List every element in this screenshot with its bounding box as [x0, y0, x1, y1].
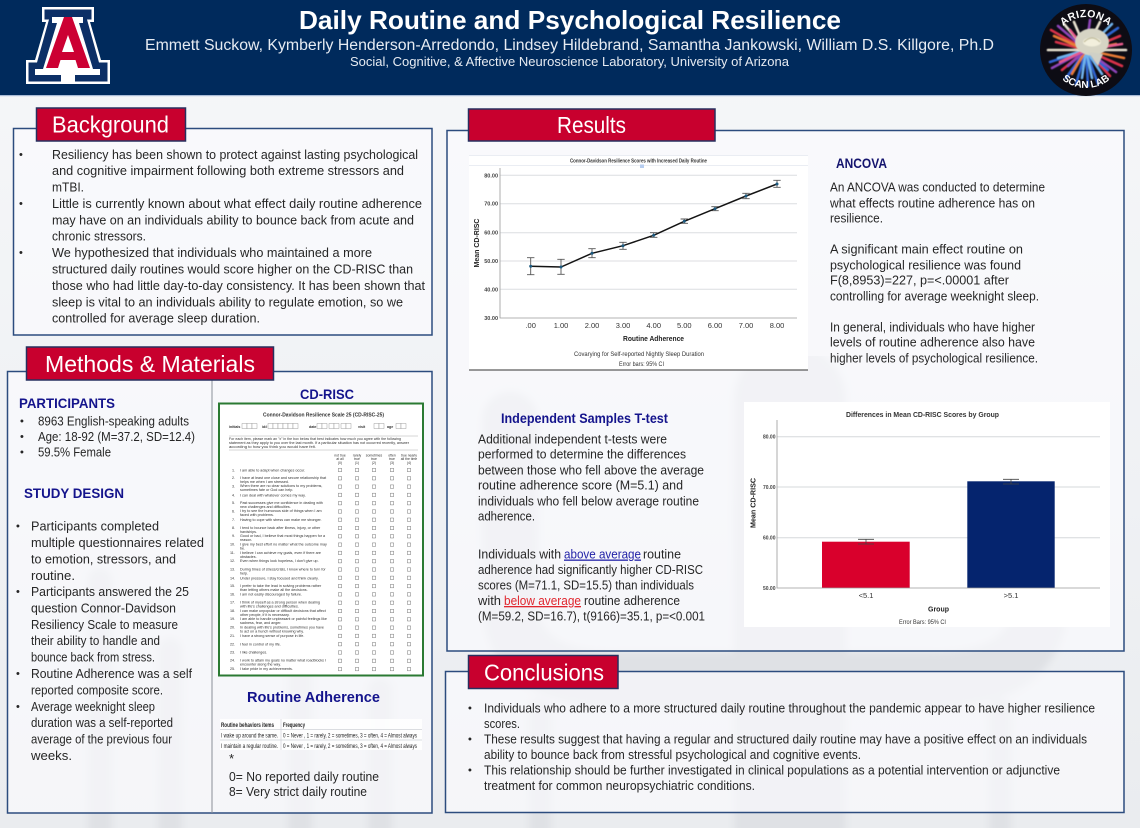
CD-RISC questionnaire form: rarely [353, 454, 362, 458]
CD-RISC questionnaire form: I have a strong sense of purpose in life. [240, 634, 304, 638]
text block: ANCOVA: higher levels of psychological resilience. [830, 350, 1038, 366]
text block: ANCOVA: A significant main effect routine on [830, 242, 1023, 256]
heading: results [468, 109, 715, 141]
CD-RISC questionnaire form: I prefer to take the lead in solving problems rather [240, 584, 322, 588]
text block: conclusions bullets: • [468, 764, 472, 776]
bar chart: CD-RISC by group: Group [928, 604, 949, 614]
text block: study design: bounce back from stress. [31, 650, 155, 664]
bar chart: CD-RISC by group: <5.1 [859, 591, 873, 600]
heading: methods and materials [26, 347, 274, 380]
CD-RISC questionnaire form [219, 404, 423, 676]
heading: conclusions: Conclusions [484, 660, 604, 686]
routine behaviours table: I maintain a regular routine. [221, 743, 278, 750]
CD-RISC questionnaire form: Even when things look hopeless, I don't give up. [240, 559, 319, 563]
CD-RISC questionnaire form: helps me when I am stressed. [240, 480, 289, 484]
panel: methods and materials [8, 347, 432, 813]
text block: study design: to emotion, stressors, and [31, 552, 176, 566]
CD-RISC questionnaire form: 3. [232, 484, 235, 488]
text block: t-test description: performed to determine the differences [478, 446, 686, 462]
line chart: CD-RISC by routine adherence: 6.00 [708, 321, 722, 330]
CD-RISC questionnaire form: When there are no clear solutions to my problems, [240, 484, 322, 488]
text block: t-test results: routine adherence [584, 593, 680, 608]
CD-RISC questionnaire form: I believe I can achieve my goals, even if there are [240, 551, 321, 555]
CD-RISC questionnaire form: I think of myself as a strong person when dealing [240, 600, 320, 604]
text block: background bullets: Resiliency has been shown to protect against lasting psychological [52, 147, 418, 162]
text block: conclusions bullets: treatment for common neuropsychiatric conditions. [484, 778, 755, 793]
CD-RISC questionnaire form: 19. [230, 617, 235, 621]
heading: background [36, 108, 186, 141]
text block: t-test description: individuals who fell below average routine [478, 494, 699, 508]
text block: study design: weeks. [30, 748, 72, 763]
CD-RISC questionnaire form: 18. [230, 609, 235, 613]
CD-RISC questionnaire form: true [371, 457, 377, 461]
text block: ANCOVA: In general, individuals who have higher [830, 320, 1036, 334]
CD-RISC questionnaire form: 20. [230, 626, 235, 630]
line chart: CD-RISC by routine adherence [469, 155, 808, 370]
heading: independent samples t-test: Independent Samples T-test [501, 411, 668, 426]
CD-RISC questionnaire form: 22. [230, 642, 235, 646]
text block: background bullets: controlled for average sleep duration. [52, 310, 260, 326]
CD-RISC questionnaire form: with life's challenges and difficulties. [240, 604, 299, 608]
CD-RISC questionnaire form: 14. [230, 576, 235, 580]
text block: t-test results: scores (M=71.1, SD=15.5) than individuals [478, 578, 694, 592]
CD-RISC questionnaire form: Past successes give me confidence in dealing with [240, 501, 323, 505]
CD-RISC questionnaire form: sadness, fear, and anger. [240, 621, 281, 625]
routine behaviours table [220, 719, 422, 750]
text block: study design: Resiliency Scale to measure [31, 617, 178, 632]
CD-RISC questionnaire form: 23. [230, 650, 235, 654]
text block: t-test results: below average [504, 593, 581, 608]
heading: routine adherence: Routine Adherence [247, 689, 380, 706]
CD-RISC questionnaire form: to act on a hunch without knowing why. [240, 630, 304, 634]
heading: study design: STUDY DESIGN [24, 485, 124, 501]
authors: Emmett Suckow, Kymberly Henderson-Arredondo, Lindsey Hildebrand, Samantha Jankowski, William D.S. Killgore, Ph.D [145, 37, 994, 54]
line chart: CD-RISC by routine adherence: Error bars: 95% CI [619, 361, 664, 368]
text block: t-test results: with [477, 593, 501, 608]
bar chart: CD-RISC by group: Differences in Mean CD-RISC Scores by Group [846, 412, 999, 419]
heading: results: Results [557, 112, 626, 138]
CD-RISC questionnaire form: (0) [338, 461, 342, 465]
CD-RISC questionnaire form: encounter along the way. [240, 662, 281, 666]
text block: conclusions bullets: • [468, 734, 472, 746]
text block: conclusions bullets: Individuals who adhere to a more structured daily routine throughout the pandemic appear to have higher resilience [484, 700, 1095, 716]
CD-RISC questionnaire form: 8. [232, 526, 235, 530]
line chart: CD-RISC by routine adherence: 50.00 [484, 259, 498, 265]
routine scale key [229, 751, 379, 799]
CD-RISC questionnaire form: I am not easily discouraged by failure. [240, 592, 302, 596]
CD-RISC questionnaire form: sometimes fate or God can help. [240, 488, 293, 492]
CD-RISC questionnaire form: 6. [232, 510, 235, 514]
text block: background bullets [19, 147, 425, 326]
line chart: CD-RISC by routine adherence: 5.00 [677, 321, 692, 330]
CD-RISC questionnaire form: Having to cope with stress can make me stronger. [240, 518, 322, 522]
CD-RISC questionnaire form: I tend to bounce back after illness, injury, or other [240, 526, 321, 530]
bar: above average [967, 481, 1055, 588]
text block: conclusions bullets [468, 700, 1095, 793]
panel: background [14, 108, 432, 335]
line chart: CD-RISC by routine adherence: Connor-Davidson Resilience Scores with Increased Daily Routine [570, 159, 707, 165]
CD-RISC questionnaire form: at all [336, 457, 344, 461]
text block: t-test description: adherence. [478, 508, 535, 524]
bar: below average [822, 542, 910, 588]
CD-RISC questionnaire form: I am able to handle unpleasant or painful feelings like [240, 617, 327, 621]
line chart: CD-RISC by routine adherence: 8.00 [770, 321, 784, 330]
routine scale key: * [229, 751, 234, 766]
CD-RISC questionnaire form: (1) [355, 461, 359, 465]
text block: t-test results [477, 546, 705, 624]
text block: background bullets: • [19, 149, 23, 161]
text block: study design: duration was a self-reported [31, 715, 173, 730]
text block: participants: 8963 English-speaking adults [38, 414, 189, 428]
routine behaviours table: Routine behaviors items [221, 722, 274, 729]
text block: background bullets: may have on an individuals ability to bounce back from acute and [52, 212, 414, 228]
CD-RISC questionnaire form: 10. [230, 542, 235, 546]
CD-RISC questionnaire form: (3) [390, 461, 394, 465]
header banner [0, 0, 1140, 96]
line chart: CD-RISC by routine adherence: 7.00 [739, 321, 753, 330]
text block: study design: their ability to handle and [31, 633, 160, 648]
CD-RISC questionnaire form: I work to attain my goals no matter what roadblocks I [240, 658, 326, 662]
text block: conclusions bullets: • [468, 702, 472, 714]
text block: background bullets: Little is currently known about what effect daily routine adherence [52, 196, 422, 211]
text block: background bullets: structured daily routines would score higher on the CD-RISC than [52, 262, 413, 276]
line chart: CD-RISC by routine adherence: Routine Adherence [623, 334, 684, 343]
CD-RISC questionnaire form: other people, if it is necessary. [240, 613, 290, 617]
line chart: CD-RISC by routine adherence: 80.00 [484, 173, 498, 179]
CD-RISC questionnaire form: 5. [232, 501, 235, 505]
text block: t-test results: (M=59.2, SD=16.7), t(9166)=35.1, p=<0.001 [478, 608, 705, 624]
CD-RISC questionnaire form: faced with problems. [240, 513, 274, 517]
CD-RISC questionnaire form: I have at least one close and secure relationship that [240, 476, 326, 480]
heading: methods and materials: Methods & Materials [45, 351, 255, 377]
CD-RISC questionnaire form: In dealing with life's problems, sometimes you have [240, 626, 324, 630]
text block: t-test results: routine [643, 546, 681, 562]
heading: CD-RISC: CD-RISC [300, 386, 354, 402]
text block: study design: question Connor-Davidson [31, 600, 176, 616]
CD-RISC questionnaire form: id# [262, 425, 267, 429]
text block: study design: routine. [31, 568, 75, 583]
CD-RISC questionnaire form: true [354, 457, 360, 461]
CD-RISC questionnaire form: 7. [232, 518, 235, 522]
text block: background bullets: • [19, 198, 23, 210]
bar chart: CD-RISC by group: 60.00 [763, 536, 776, 542]
CD-RISC questionnaire form: I give my best effort no matter what the outcome may [240, 542, 327, 546]
CD-RISC questionnaire form: I try to see the humorous side of things when I am [240, 509, 322, 513]
CD-RISC questionnaire form: 9. [232, 534, 235, 538]
text block: participants: Age: 18-92 (M=37.2, SD=12.4) [38, 429, 195, 444]
text block: study design: reported composite score. [31, 682, 163, 698]
text block: ANCOVA: levels of routine adherence also have [830, 334, 1035, 350]
CD-RISC questionnaire form: 11. [230, 551, 235, 555]
CD-RISC questionnaire form: (2) [372, 461, 376, 465]
CD-RISC questionnaire form: I feel in control of my life. [240, 642, 281, 646]
line chart: CD-RISC by routine adherence: 30.00 [484, 316, 498, 322]
text block: background bullets: sleep is vital to an individuals ability to regulate emotion, so we [52, 294, 403, 310]
CD-RISC questionnaire form: true nearly [401, 454, 417, 458]
text block: study design: Participants completed [31, 518, 159, 534]
text block: participants: 59.5% Female [38, 444, 111, 460]
line chart: CD-RISC by routine adherence: 3.00 [616, 321, 630, 330]
CD-RISC questionnaire form: help. [240, 572, 248, 576]
CD-RISC questionnaire form: true [389, 457, 395, 461]
routine behaviours table: Frequency [283, 722, 305, 729]
CD-RISC questionnaire form: sometimes [366, 454, 382, 458]
icon: Arizona SCAN Lab circular logo [1040, 4, 1132, 96]
title: Daily Routine and Psychological Resilience [299, 5, 841, 35]
text block: study design: average of the previous four [31, 732, 173, 746]
CD-RISC questionnaire form: 21. [230, 634, 235, 638]
heading: ANCOVA: ANCOVA [836, 156, 887, 171]
text block: study design: Participants answered the 25 [31, 584, 189, 599]
panel: conclusions [446, 656, 1124, 812]
line chart: CD-RISC by routine adherence: 1.00 [554, 321, 568, 330]
line chart: CD-RISC by routine adherence: .00 [525, 321, 536, 330]
text block: background bullets: We hypothesized that individuals who maintained a more [52, 245, 372, 260]
text block: background bullets: • [19, 247, 23, 259]
text block: ANCOVA: controlling for average weeknight sleep. [830, 288, 1039, 304]
brain [1075, 28, 1109, 66]
CD-RISC questionnaire form: 24. [230, 658, 235, 662]
text block: participants: • [20, 416, 24, 428]
text block: study design: Routine Adherence was a self [31, 666, 192, 681]
CD-RISC questionnaire form: reason. [240, 538, 252, 542]
text block: study design: multiple questionnaires related [31, 535, 204, 550]
CD-RISC questionnaire form: For each item, please mark an "x" in the box below that best indicates how much you agree with the following [229, 437, 401, 441]
bar chart: CD-RISC by group: Error Bars: 95% CI [899, 620, 946, 626]
heading: participants: PARTICIPANTS [19, 395, 115, 411]
text block: ANCOVA: An ANCOVA was conducted to determine [830, 180, 1045, 194]
text block: study design: • [16, 520, 20, 532]
text block: t-test results: above average [564, 546, 641, 562]
CD-RISC questionnaire form: visit [358, 425, 366, 429]
icon: University of Arizona block A logo [26, 7, 110, 84]
CD-RISC questionnaire form: obstacles. [240, 555, 257, 559]
bar chart: CD-RISC by group: 50.00 [763, 586, 776, 592]
bar chart: CD-RISC by group: 70.00 [763, 485, 776, 491]
CD-RISC questionnaire form: initials [229, 425, 240, 429]
CD-RISC questionnaire form: 13. [230, 568, 235, 572]
CD-RISC questionnaire form: 2. [232, 476, 235, 480]
text block: t-test results: adherence had significantly higher CD-RISC [478, 562, 703, 577]
routine scale key: 8= Very strict daily routine [229, 784, 367, 799]
routine behaviours table: 0 = Never , 1 = rarely, 2 = sometimes, 3 = often, 4 = Almost always [283, 732, 417, 740]
line chart: CD-RISC by routine adherence: 60.00 [484, 231, 498, 237]
CD-RISC questionnaire form: Connor-Davidson Resilience Scale 25 (CD-RISC-25) [263, 412, 384, 418]
CD-RISC questionnaire form: Under pressure, I stay focused and think clearly. [240, 576, 319, 580]
text block: ANCOVA [829, 180, 1045, 366]
CD-RISC questionnaire form: 17. [230, 600, 235, 604]
text block: t-test results: Individuals with [478, 546, 561, 562]
text block: study design [16, 518, 204, 763]
bar chart: CD-RISC by group: 80.00 [763, 434, 776, 440]
CD-RISC questionnaire form: 25. [230, 667, 235, 671]
text block: conclusions bullets: ability to bounce back from stressful psychological and cognitive events. [484, 747, 861, 762]
CD-RISC questionnaire form: all the time [401, 457, 417, 461]
panel: results [447, 109, 1124, 651]
routine scale key: 0= No reported daily routine [229, 769, 379, 784]
icon: Arizona SCAN Lab circular logo: SCAN LAB [1063, 75, 1109, 88]
line chart: CD-RISC by routine adherence: Covarying for Self-reported Nightly Sleep Duration [574, 351, 704, 358]
text block: conclusions bullets: scores. [484, 716, 520, 731]
CD-RISC questionnaire form: 12. [230, 559, 235, 563]
CD-RISC questionnaire form: be. [240, 546, 245, 550]
text block: ANCOVA: psychological resilience was found [830, 258, 1021, 272]
affiliation: Social, Cognitive, & Affective Neuroscience Laboratory, University of Arizona [350, 55, 789, 69]
text block: study design: • [16, 668, 20, 680]
line chart: CD-RISC by routine adherence: 2.00 [585, 321, 599, 330]
CD-RISC questionnaire form: 15. [230, 584, 235, 588]
routine behaviours table: I wake up around the same. [221, 732, 278, 740]
CD-RISC questionnaire form: 1. [232, 468, 235, 472]
CD-RISC questionnaire form: than letting others make all the decisions. [240, 588, 308, 592]
text block: study design: • [16, 586, 20, 598]
CD-RISC questionnaire form: according to how you think you would have felt. [229, 445, 316, 449]
CD-RISC questionnaire form: I take pride in my achievements. [240, 667, 293, 671]
CD-RISC questionnaire form: Good or bad, I believe that most things happen for a [240, 534, 326, 538]
CD-RISC questionnaire form: new challenges and difficulties. [240, 505, 291, 509]
CD-RISC questionnaire form: I can make unpopular or difficult decisions that affect [240, 609, 326, 613]
text block: ANCOVA: F(8,8953)=227, p=<.00001 after [830, 272, 1010, 288]
heading: background: Background [52, 112, 169, 138]
line chart: CD-RISC by routine adherence: 4.00 [646, 321, 661, 330]
routine behaviours table: 0 = Never , 1 = rarely, 2 = sometimes, 3 = often, 4 = Almost always [283, 743, 417, 750]
line chart: CD-RISC by routine adherence: 70.00 [484, 202, 498, 208]
CD-RISC questionnaire form: often [388, 454, 396, 458]
text block: t-test description: between those who fell above the average [478, 462, 704, 478]
CD-RISC questionnaire form: hardships. [240, 530, 257, 534]
line chart: CD-RISC by routine adherence: Mean CD-RISC [472, 218, 481, 268]
heading: conclusions [468, 656, 618, 688]
text block: ANCOVA: resilience. [830, 210, 883, 226]
text block: conclusions bullets: This relationship should be further investigated in clinical populations as a potential intervention or adjunctive [484, 762, 1060, 778]
text block: t-test description: Additional independent t-tests were [478, 432, 667, 446]
text block: background bullets: mTBI. [52, 180, 84, 194]
text block: background bullets: chronic stressors. [52, 228, 146, 244]
CD-RISC questionnaire form: (4) [407, 461, 411, 465]
text block: participants [20, 414, 195, 460]
CD-RISC questionnaire form: not true [334, 454, 346, 458]
CD-RISC questionnaire form: age [387, 425, 393, 429]
text block: ANCOVA: what effects routine adherence has on [829, 196, 1035, 210]
bar chart: CD-RISC by group: Mean CD-RISC [748, 477, 758, 528]
text block: background bullets: and cognitive impairment following both extreme stressors and [52, 163, 404, 178]
CD-RISC questionnaire form: 4. [232, 494, 235, 498]
line chart: CD-RISC by routine adherence: 40.00 [484, 287, 498, 293]
text block: t-test description [478, 432, 704, 524]
CD-RISC questionnaire form: I like challenges. [240, 650, 267, 654]
bar chart: CD-RISC by group: >5.1 [1004, 591, 1018, 600]
text block: conclusions bullets: These results suggest that having a regular and structured daily routine may have a positive effect on an individuals [484, 732, 1087, 746]
text block: t-test description: routine adherence score (M=5.1) and [478, 478, 683, 492]
text block: background bullets: those who had little day-to-day consistency. It has been shown that [52, 278, 425, 293]
text block: study design: • [16, 701, 20, 713]
CD-RISC questionnaire form: date [309, 425, 316, 429]
CD-RISC questionnaire form: 16. [230, 592, 235, 596]
text block: participants: • [20, 446, 24, 458]
CD-RISC questionnaire form: During times of stress/crisis, I know where to turn for [240, 568, 326, 572]
CD-RISC questionnaire form: I can deal with whatever comes my way. [240, 494, 306, 498]
icon: Arizona SCAN Lab circular logo: ARIZONA [1061, 10, 1110, 26]
text block: participants: • [20, 431, 24, 443]
text block: study design: Average weeknight sleep [31, 699, 155, 714]
CD-RISC questionnaire form: statement as they apply to you over the last month. If a particular situation has not occurred recently, answer [229, 441, 410, 445]
bar chart: CD-RISC by group [744, 402, 1110, 627]
CD-RISC questionnaire form: I am able to adapt when changes occur. [240, 468, 305, 472]
